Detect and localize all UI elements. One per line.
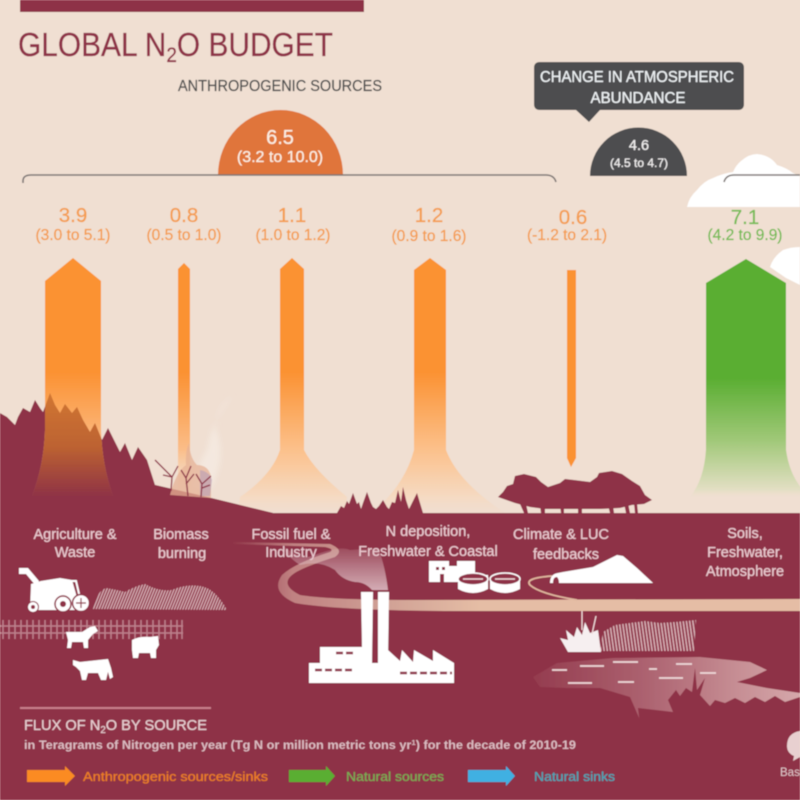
title: 2: [166, 44, 177, 67]
legend subtitle: 1: [411, 740, 416, 747]
legend subtitle: in Teragrams of Nitrogen per year (Tg N or million metric tons yr: [24, 740, 375, 752]
pond ripples: [552, 662, 716, 683]
value: soils: [708, 206, 782, 244]
arrow: climate feedbacks: [567, 270, 576, 467]
ground slope over arrows: [155, 485, 440, 520]
factory smoke: [282, 545, 388, 590]
natural sources bracket: [724, 175, 800, 182]
label: biomass: Biomass: [153, 527, 209, 543]
atmospheric change dome: [590, 128, 687, 176]
callout: change in atmospheric abundance: [534, 62, 744, 122]
value: climate: 0.6: [559, 206, 587, 229]
label: soils: Atmosphere: [706, 564, 784, 580]
label: agriculture: Waste: [55, 545, 95, 561]
title: GLOBAL N: [18, 26, 182, 63]
value: agriculture: (3.0 to 5.1): [36, 227, 110, 244]
value: soils: (4.2 to 9.9): [708, 227, 782, 244]
value: N deposition: [392, 204, 466, 245]
legend divider: [20, 707, 211, 709]
icon: mound / thawing land: [550, 555, 653, 583]
legend title: 2: [100, 725, 106, 736]
atmospheric change dome: 4.6: [629, 138, 649, 154]
total anthropogenic dome: (3.2 to 10.0): [237, 149, 323, 166]
value: fossil: [256, 204, 330, 244]
fence: [0, 620, 183, 639]
value: fossil: (1.0 to 1.2): [256, 227, 330, 244]
anthropogenic bracket: [23, 175, 556, 183]
value: agriculture: 3.9: [59, 204, 87, 227]
heading: anthropogenic sources: ANTHROPOGENIC SOURCES: [178, 78, 382, 95]
pine tree line: [337, 487, 423, 513]
label: fossil fuel: Industry: [265, 545, 318, 561]
value: biomass: [147, 204, 221, 244]
title: O BUDGET: [177, 26, 333, 63]
pond grass: [638, 668, 800, 725]
legend: natural sources: [289, 766, 445, 786]
legend: anthropogenic: Anthropogenic sources/sinks: [83, 769, 269, 784]
label: agriculture: Agriculture &: [33, 527, 117, 543]
tree group: [498, 471, 652, 513]
pond: [533, 657, 800, 720]
legend title: FLUX OF N: [24, 717, 102, 734]
value: soils: 7.1: [731, 206, 759, 229]
label: fossil fuel: Fossil fuel &: [252, 527, 330, 543]
legend: natural sinks: Natural sinks: [534, 769, 616, 784]
wetland reeds: [560, 611, 696, 652]
arrow: agriculture and waste: [32, 258, 113, 496]
icon: cow walking: [73, 659, 113, 680]
callout: change in atmospheric abundance: ABUNDANCE: [590, 90, 686, 107]
total anthropogenic dome: 6.5: [266, 127, 294, 149]
legend: anthropogenic: [27, 766, 269, 786]
cloud lower: [770, 247, 800, 285]
forest seen through agriculture arrow: [32, 394, 113, 496]
value: biomass: 0.8: [170, 204, 198, 227]
legend: natural sinks: [468, 766, 616, 786]
value: N deposition: (0.9 to 1.6): [392, 228, 466, 245]
icon: harvester: [19, 568, 90, 612]
total anthropogenic dome: [218, 110, 343, 175]
value: climate: [527, 206, 607, 244]
value: N deposition: 1.2: [415, 204, 443, 227]
icon: cow standing: [66, 626, 98, 648]
top bar: [20, 0, 364, 12]
label: climate: Climate & LUC: [513, 527, 609, 543]
icon: speech bubble: [787, 731, 800, 761]
biomass burning trees and flames: [155, 443, 212, 498]
icon: cow facing: [132, 636, 159, 658]
cloud upper: [687, 154, 800, 207]
legend title: O BY SOURCE: [106, 717, 207, 734]
legend subtitle: ) for the decade of 2010-19: [416, 740, 576, 752]
label: soils: Soils,: [727, 526, 763, 542]
tributary: [529, 576, 577, 600]
arrow: soils, freshwater, atmosphere: [690, 259, 800, 497]
cropped label: Bas: [780, 767, 800, 779]
label: N deposition: N deposition,: [386, 524, 470, 540]
atmospheric change dome: (4.5 to 4.7): [610, 156, 668, 170]
label: N deposition: Freshwater & Coastal: [358, 544, 498, 560]
ground and forest: [0, 393, 800, 800]
label: soils: Freshwater,: [707, 545, 783, 561]
icon: factory: [309, 592, 454, 683]
icon: wastewater plant: [429, 561, 520, 593]
value: fossil: 1.1: [278, 204, 306, 227]
river: [233, 542, 800, 611]
value: climate: (-1.2 to 2.1): [527, 227, 607, 244]
label: climate: feedbacks: [533, 547, 599, 563]
callout: change in atmospheric abundance: CHANGE IN ATMOSPHERIC: [540, 69, 734, 86]
label: biomass: burning: [158, 546, 206, 562]
arrow: N deposition: [372, 258, 505, 513]
value: agriculture: [36, 204, 110, 244]
arrow: biomass burning: [178, 263, 190, 495]
crop field: [93, 584, 227, 610]
biomass smoke: [190, 395, 233, 490]
legend: natural sources: Natural sources: [346, 769, 445, 784]
arrow: fossil fuel and industry: [238, 258, 347, 512]
value: biomass: (0.5 to 1.0): [147, 227, 221, 244]
